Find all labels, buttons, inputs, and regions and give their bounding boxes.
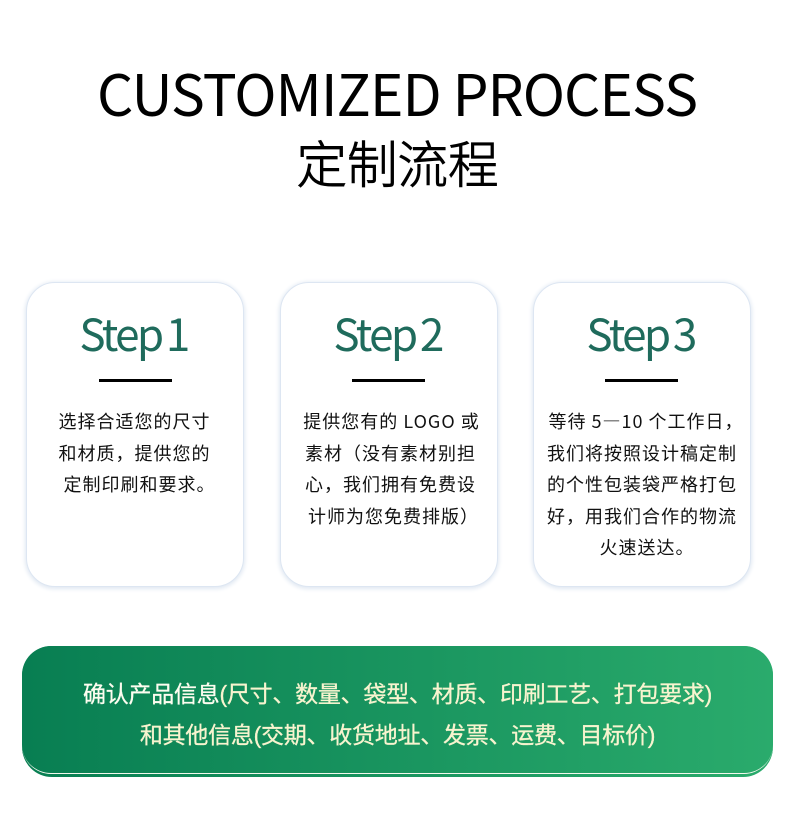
text: step 1 description: 选择合适您的尺寸 — [58, 408, 210, 434]
banner inner face — [22, 646, 773, 774]
text: step 1 description — [58, 408, 216, 497]
divider: step 1 — [99, 379, 172, 382]
text: step 1 description: 和材质，提供您的 — [58, 440, 210, 466]
text: step 2 description: 计师为您免费排版） — [308, 503, 479, 529]
divider: step 3 — [605, 379, 678, 382]
heading: step 3: Step 3 — [586, 300, 695, 364]
text: step 2 description — [303, 408, 480, 529]
panel: step 3 — [533, 282, 751, 587]
text: step 3 description: 好，用我们合作的物流 — [547, 503, 737, 529]
text: step 3 description: 火速送达。 — [600, 534, 694, 560]
banner text line 2: 和其他信息(交期、收货地址、发票、运费、目标价) — [140, 722, 655, 748]
text: step 3 description — [547, 408, 744, 560]
heading: step 1: Step 1 — [79, 300, 188, 364]
title: English heading: CUSTOMIZED PROCESS — [97, 51, 697, 133]
text: step 2 description: 心，我们拥有免费设 — [305, 471, 476, 497]
text: step 3 description: 等待 5—10 个工作日， — [548, 408, 744, 434]
title: Chinese heading: 定制流程 — [296, 124, 498, 198]
text: step 2 description: 素材（没有素材别担 — [305, 440, 476, 466]
banner text line 1: 确认产品信息(尺寸、数量、袋型、材质、印刷工艺、打包要求) — [83, 681, 712, 707]
text: step 2 description: 提供您有的 LOGO 或 — [303, 408, 480, 434]
panel: step 2 — [280, 282, 498, 587]
banner: information to confirm — [22, 646, 773, 777]
text: step 3 description: 我们将按照设计稿定制 — [547, 440, 737, 466]
text: step 1 description: 定制印刷和要求。 — [64, 471, 216, 497]
heading: step 2: Step 2 — [333, 300, 442, 364]
panel: step 1 — [26, 282, 244, 587]
divider: step 2 — [352, 379, 425, 382]
text: step 3 description: 的个性包装袋严格打包 — [547, 471, 737, 497]
